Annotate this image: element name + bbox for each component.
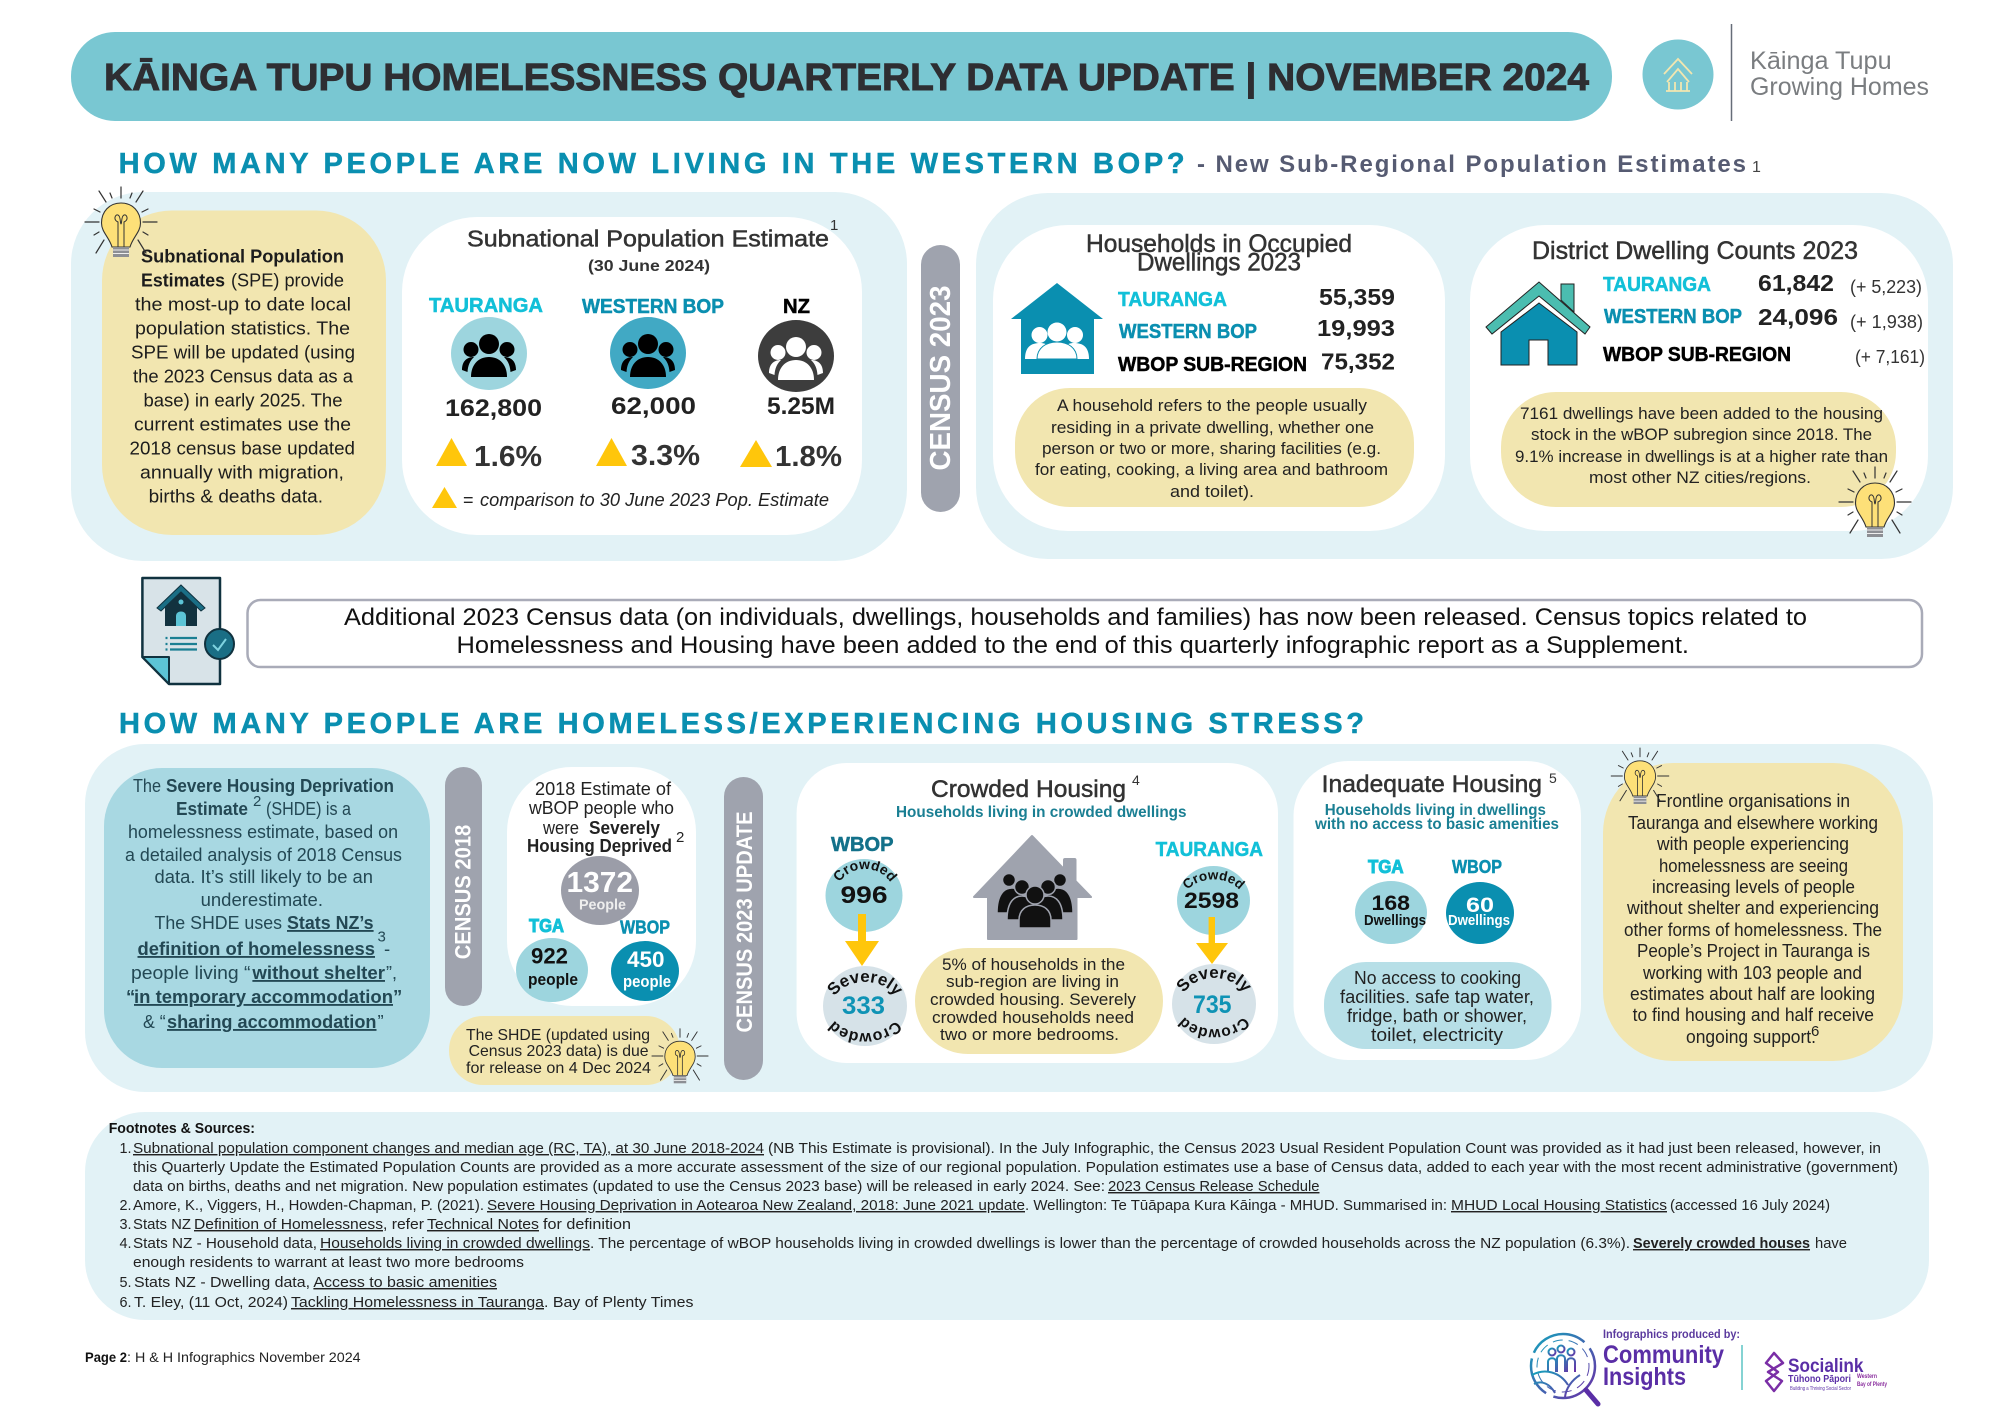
panel: severe housing deprivation estimate: definition of homelessness [138,938,375,959]
panel: severe housing deprivation estimate: ” [378,1011,384,1032]
callout: household definition: and toilet). [1170,482,1254,501]
heading: how many people in the Western BOP: 1 [1752,159,1761,176]
footnote 3 [120,1217,631,1233]
logo: Community Insights [1531,1327,1740,1404]
footnote 5 [120,1275,497,1291]
callout: SHDE release date: Census 2023 data) is due [469,1043,649,1060]
panel: frontline organisations: homelessness are seeing [1659,856,1848,876]
table: dwellings: 61,842 [1758,270,1834,296]
panel: SPE explanation: the most-up to date local [135,294,351,314]
callout: dwelling growth: 7161 dwellings have been added to the housing [1520,404,1883,423]
stat: TGA 922 people: people [528,970,578,989]
panel: 2018 estimate of severely housing deprived: 2 [676,829,684,846]
footnote 6: . Bay of Plenty Times [544,1295,694,1311]
panel: severe housing deprivation estimate: Stats NZ’s [287,912,374,933]
stat: Tauranga crowded: TAURANGA [1156,839,1263,861]
callout: 5% of households: crowded households need [932,1008,1134,1027]
heading: crowded housing: Households living in crowded dwellings [896,804,1186,821]
table: households: 55,359 [1319,284,1395,310]
stat: TGA 168 dwellings [1355,857,1427,944]
stat: WBOP 450 people: people [623,972,671,991]
panel: frontline organisations: increasing levels of people [1652,877,1855,897]
callout: 5% of households: 5% of households in the [942,955,1125,974]
footnote 2: (accessed 16 July 2024) [1670,1198,1830,1214]
logo: Socialink [1742,1345,1888,1392]
stat: TGA 168 dwellings: Dwellings [1364,912,1426,929]
stat: 1372 people: 1372 [566,867,633,899]
footnote 4: have [1815,1236,1847,1252]
panel: severe housing deprivation estimate: 3 [378,928,386,946]
stat: WBOP 60 dwellings [1446,857,1514,944]
logo: Community Insights: Insights [1603,1363,1686,1391]
footnote 6: 6. [120,1295,132,1311]
panel: severe housing deprivation estimate: homelessness estimate, based on [128,821,398,842]
heading: how many people are homeless: HOW MANY PEOPLE ARE HOMELESS/EXPERIENCING HOUSING STRESS? [119,708,1364,740]
footnote 5: Stats NZ - Dwelling data, [134,1275,310,1291]
callout: SHDE release date: The SHDE (updated using [466,1027,650,1044]
stat: 1372 people: People [579,896,626,914]
footnote 3: Technical Notes [427,1217,539,1233]
heading: crowded housing [896,772,1186,821]
callout: no access to amenities: facilities. safe tap water, [1340,987,1534,1007]
panel: 2018 estimate of severely housing deprived: Severely [589,818,660,838]
panel: severe housing deprivation estimate: (SHDE) is a [266,798,352,819]
panel: dwellings background [976,193,1953,559]
stat: Tauranga crowded [1156,839,1263,1044]
panel: frontline organisations: ongoing support. [1686,1027,1816,1047]
heading: inadequate housing: Inadequate Housing [1322,771,1542,798]
footnote 1: 2023 Census Release Schedule [1108,1179,1320,1195]
icon: light bulb frontline panel [1611,748,1669,804]
stat: Western BOP population: 3.3% [631,440,700,472]
footnote 3: , refer [383,1217,424,1233]
footnote 1: (NB This Estimate is provisional). In the July Infographic, the Census 2023 Usual Resident Population Count was provided as it had just been released, however, in [768,1141,1881,1157]
panel: SPE explanation: Subnational Population [141,246,344,266]
panel: households in occupied dwellings [993,225,1445,531]
callout: household definition: residing in a private dwelling, whether one [1051,418,1374,437]
heading: households in occupied dwellings [1086,230,1352,276]
panel: district dwelling counts [1470,225,1928,531]
footnote 2: Severe Housing Deprivation in Aotearoa New Zealand, 2018: June 2021 update [487,1198,1025,1214]
stat: WBOP crowded: Crowded [827,1021,901,1043]
footnote 1: data on births, deaths and net migration. New population estimates (updated to use the Census 2023 base) will be released in early 2024. See: [133,1179,1105,1195]
heading: how many people in the Western BOP: HOW MANY PEOPLE ARE NOW LIVING IN THE WESTERN BOP? [119,148,1185,180]
footnote 4: enough residents to warrant at least two more bedrooms [133,1255,524,1271]
panel: severe housing deprivation estimate: data. It’s still likely to be an [154,866,373,887]
stat: NZ population: 5.25M [767,393,835,420]
table: dwellings: WESTERN BOP [1604,306,1742,328]
footnote 6: T. Eley, (11 Oct, 2024) [134,1295,288,1311]
footnote 2 [120,1198,1830,1214]
callout: household definition: person or two or more, sharing facilities (e.g. [1042,439,1381,458]
table: dwellings: (+ 1,938) [1850,312,1923,332]
panel: subnational population estimate [402,217,862,535]
stat: TGA 168 dwellings: TGA [1368,857,1404,877]
legend: triangle comparison: comparison to 30 June 2023 Pop. Estimate [480,490,829,510]
panel: 2018 estimate of severely housing deprived: Housing Deprived [527,836,672,856]
panel: 2018 estimate of severely housing deprived [507,767,696,1006]
stat: Tauranga crowded: 2598 [1184,888,1239,913]
panel: homelessness background [85,744,1933,1092]
panel: frontline organisations: Tauranga and elsewhere working [1628,813,1878,833]
footnote 1 [120,1141,1898,1195]
notice box: additional census data: Additional 2023 Census data (on individuals, dwellings, households and families) has now been released. Census topics related to [344,604,1807,631]
footnote 3: Stats NZ [133,1217,191,1233]
footnote 1: Subnational population component changes and median age (RC, TA), at 30 June 2018-2024 [133,1141,764,1157]
legend: triangle comparison: = [463,490,474,510]
panel: 2018 estimate of severely housing deprived: were [542,818,579,838]
stat: WBOP 450 people: WBOP [620,918,670,938]
stat: Tauranga population [429,295,543,473]
footnote 4: Severely crowded houses [1633,1236,1810,1252]
panel: frontline organisations [1603,763,1903,1061]
callout: household definition [1015,388,1414,507]
footnote 4: . The percentage of wBOP households living in crowded dwellings is lower than the percentage of crowded households across the NZ population (6.3%). [590,1236,1630,1252]
callout: dwelling growth: stock in the wBOP subregion since 2018. The [1531,425,1872,444]
panel: 2018 estimate of severely housing deprived: wBOP people who [528,798,674,818]
logo: Socialink: Western [1857,1374,1877,1380]
panel: inadequate housing [1294,761,1581,1060]
footnote 2: 2. [120,1198,132,1214]
table: dwellings: (+ 5,223) [1850,277,1922,297]
stat: TGA 922 people: TGA [529,916,564,936]
heading: inadequate housing: with no access to basic amenities [1314,816,1559,833]
label: census 2018 [445,767,482,1006]
callout: SHDE release date [449,1016,680,1085]
panel: frontline organisations: to find housing and half receive [1633,1005,1874,1025]
heading: subnational population estimate [467,217,838,275]
stat: NZ population: 1.8% [775,441,842,473]
stat: NZ population [740,296,842,473]
icon: document with house [142,578,234,684]
logo: Kāinga Tupu Growing Homes: Growing Homes [1750,73,1929,101]
table: dwellings [1603,270,1925,367]
stat: TGA 922 people: 922 [531,944,568,969]
notice box: additional census data: Homelessness and Housing have been added to the end of this quarterly infographic report as a Supplement. [456,632,1689,659]
stat: WBOP crowded [823,834,907,1046]
logo: Socialink: Socialink [1788,1356,1864,1377]
icon: light bulb dwelling callout [1839,467,1911,537]
callout: no access to amenities: fridge, bath or shower, [1347,1006,1527,1026]
table: households: TAURANGA [1118,289,1227,311]
footnote 4: Households living in crowded dwellings [320,1236,590,1252]
panel: frontline organisations: with people experiencing [1656,834,1849,854]
footnote 3: 3. [120,1217,132,1233]
panel: SPE explanation: Estimates [141,270,225,290]
stat: TGA 168 dwellings: 168 [1372,892,1410,915]
footnote 1: 1. [120,1141,132,1157]
label: census 2023: CENSUS 2023 [925,286,957,470]
footnote 4: Stats NZ - Household data, [133,1236,317,1252]
title banner: KĀINGA TUPU HOMELESSNESS QUARTERLY DATA UPDATE | NOVEMBER 2024 [104,57,1589,99]
callout: no access to amenities [1324,962,1552,1049]
callout: SHDE release date: for release on 4 Dec 2024 [466,1060,651,1077]
footnote 5: 5. [120,1275,132,1291]
callout: 5% of households: two or more bedrooms. [940,1025,1119,1044]
logo: Community Insights: Community [1603,1341,1724,1369]
panel: frontline organisations: working with 103 people and [1642,963,1862,983]
heading: subnational population estimate: (30 June 2024) [588,258,710,275]
heading: district dwelling counts: District Dwelling Counts 2023 [1532,237,1858,265]
table: households: WBOP SUB-REGION [1118,354,1307,376]
table: households: 75,352 [1321,348,1395,374]
stat: Western BOP population [582,296,724,472]
heading: subnational population estimate: 1 [830,217,838,234]
footnote 2: . Wellington: Te Tūāpapa Kura Kāinga - MHUD. Summarised in: [1025,1198,1447,1214]
panel: severe housing deprivation estimate: Severe Housing Deprivation [166,775,394,796]
panel: crowded housing [796,763,1278,1063]
callout: 5% of households: sub-region are living in [946,972,1119,991]
panel: 2018 estimate of severely housing deprived: 2018 Estimate of [535,779,672,799]
footnote 4 [120,1236,1847,1271]
heading: subnational population estimate: Subnational Population Estimate [467,226,829,252]
panel: SPE explanation: 2018 census base updated [130,438,355,458]
heading: households in occupied dwellings: Dwellings 2023 [1137,248,1301,276]
heading: households in occupied dwellings: Households in Occupied [1086,230,1352,258]
panel: severe housing deprivation estimate: without shelter [251,962,385,983]
callout: dwelling growth: most other NZ cities/regions. [1589,468,1811,487]
heading: how many people in the Western BOP [119,148,1761,180]
stat: NZ population: NZ [783,296,810,318]
footnote 1: this Quarterly Update the Estimated Population Counts are provided as a more accurate assessment of the size of our regional population. Population estimates use a base of Census data, added to each year with the most recent administrative (government) [133,1160,1898,1176]
stat: WBOP crowded: 996 [840,882,888,909]
title banner [71,32,1612,121]
panel: SPE explanation: the 2023 Census data as a [133,366,354,386]
panel: SPE explanation: births & deaths data. [149,486,323,506]
table: households [1118,284,1395,376]
callout: household definition: for eating, cooking, a living area and bathroom [1035,460,1388,479]
table: dwellings: TAURANGA [1603,274,1711,296]
footnote 6 [120,1295,694,1311]
panel: severe housing deprivation estimate: people living “ [131,962,250,983]
panel: frontline organisations: Frontline organisations in [1656,791,1850,811]
panel: frontline organisations: without shelter and experiencing [1626,898,1879,918]
table: dwellings: 24,096 [1758,304,1838,330]
panel: SPE explanation [102,210,386,535]
heading: how many people in the Western BOP: - New Sub-Regional Population Estimates [1197,151,1746,178]
panel: severe housing deprivation estimate: The SHDE uses [154,912,282,933]
panel: SPE explanation: (SPE) provide [231,270,344,290]
stat: WBOP crowded: Crowded [834,861,898,882]
notice box: additional census data [248,600,1922,667]
stat: Tauranga crowded: Severely [1176,969,1251,991]
footnote 2: Amore, K., Viggers, H., Howden-Chapman, P. (2021). [133,1198,484,1214]
callout: household definition: A household refers to the people usually [1057,396,1368,415]
heading: crowded housing: 4 [1132,772,1140,788]
table: dwellings: WBOP SUB-REGION [1603,344,1791,366]
panel: severe housing deprivation estimate [104,768,430,1068]
stat: Western BOP population: 62,000 [611,393,696,420]
icon: teal roof house [1486,282,1590,365]
footnote 6: Tackling Homelessness in Tauranga [291,1295,544,1311]
stat: Western BOP population: WESTERN BOP [582,296,724,318]
icon: light bulb SHDE callout [652,1029,708,1083]
callout: no access to amenities: No access to cooking [1354,968,1521,988]
footnote 3: Definition of Homelessness [194,1217,383,1233]
heading: inadequate housing: Households living in dwellings [1325,802,1546,819]
footnote 5: Access to basic amenities [313,1275,497,1291]
panel: severe housing deprivation estimate: “ [126,986,135,1007]
stat: Tauranga population: 162,800 [445,395,542,422]
stat: TGA 922 people [516,916,588,1002]
logo: Socialink: Tūhono Pāpori [1788,1373,1851,1385]
panel: severe housing deprivation estimate: sharing accommodation [167,1011,376,1032]
stat: Tauranga crowded: Crowded [1183,871,1246,890]
stat: Tauranga population: TAURANGA [429,295,543,317]
heading: crowded housing: Crowded Housing [931,776,1126,803]
panel: frontline organisations: People’s Project in Tauranga is [1637,941,1870,961]
table: households: WESTERN BOP [1119,321,1257,343]
icon: house with five people [974,836,1091,939]
logo: Kāinga Tupu Growing Homes: Kāinga Tupu [1750,47,1892,75]
stat: WBOP 450 people [611,918,679,1001]
panel: SPE explanation: base) in early 2025. The [144,390,342,410]
stat: WBOP crowded: 333 [842,992,885,1020]
logo: Kāinga Tupu Growing Homes [1642,24,1929,121]
panel: severe housing deprivation estimate: - [384,938,390,959]
table: dwellings: (+ 7,161) [1855,347,1925,367]
label: census 2023 update [724,777,763,1080]
stat: WBOP 450 people: 450 [627,947,664,972]
panel: SPE explanation: population statistics. The [135,318,350,338]
table: households: 19,993 [1317,315,1395,341]
logo: Socialink: Building a Thriving Social Sector [1790,1386,1851,1392]
heading: inadequate housing [1314,770,1559,833]
callout: dwelling growth [1501,392,1896,507]
stat: Tauranga crowded: 735 [1193,991,1232,1019]
panel: severe housing deprivation estimate: underestimate. [201,889,323,910]
label: census 2018: CENSUS 2018 [451,825,476,959]
callout: no access to amenities: toilet, electricity [1371,1025,1503,1045]
stat: WBOP 60 dwellings: 60 [1466,894,1494,917]
page number: Page 2 [85,1349,127,1365]
panel: SPE explanation: SPE will be updated (using [131,342,355,362]
panel: footnotes and sources: Footnotes & Sources: [109,1121,255,1137]
panel: footnotes and sources [85,1112,1929,1320]
stat: WBOP 60 dwellings: Dwellings [1448,912,1510,929]
panel: population background [71,192,907,561]
callout: 5% of households [915,948,1163,1054]
footnote 3: for definition [543,1217,631,1233]
panel: SPE explanation: current estimates use the [134,414,351,434]
panel: severe housing deprivation estimate: a detailed analysis of 2018 Census [125,844,402,865]
stat: 1372 people [561,856,639,925]
stat: WBOP 60 dwellings: WBOP [1452,857,1502,877]
logo: Socialink: Bay of Plenty [1857,1382,1888,1388]
label: census 2023 [921,245,960,512]
panel: severe housing deprivation estimate: The [133,775,161,796]
page number: : H & H Infographics November 2024 [127,1349,361,1365]
panel: frontline organisations: estimates about half are looking [1630,984,1875,1004]
label: census 2023 update: CENSUS 2023 UPDATE [732,812,757,1032]
callout: 5% of households: crowded housing. Severely [930,990,1136,1009]
panel: frontline organisations: 6 [1811,1023,1819,1040]
icon: light bulb top-left [85,187,157,257]
panel: severe housing deprivation estimate: 2 [253,793,261,810]
stat: WBOP crowded: WBOP [831,834,894,856]
stat: WBOP crowded: Severely [828,973,902,994]
logo: Community Insights: Infographics produced by: [1603,1327,1740,1341]
panel: frontline organisations: other forms of homelessness. The [1624,920,1882,940]
panel: severe housing deprivation estimate: ” [393,986,402,1007]
panel: severe housing deprivation estimate: & “ [143,1011,166,1032]
heading: inadequate housing: 5 [1549,770,1557,786]
stat: Tauranga crowded: Crowded [1177,1017,1249,1038]
footnote 2: MHUD Local Housing Statistics [1451,1198,1667,1214]
stat: Tauranga population: 1.6% [474,441,542,473]
footnote 4: 4. [120,1236,132,1252]
panel: SPE explanation: annually with migration, [140,462,344,482]
icon: house with people [1011,283,1103,374]
panel: severe housing deprivation estimate: ”, [386,962,397,983]
panel: severe housing deprivation estimate: Estimate [176,798,248,819]
panel: severe housing deprivation estimate: in temporary accommodation [134,986,393,1007]
callout: dwelling growth: 9.1% increase in dwellings is at a higher rate than [1515,447,1888,466]
